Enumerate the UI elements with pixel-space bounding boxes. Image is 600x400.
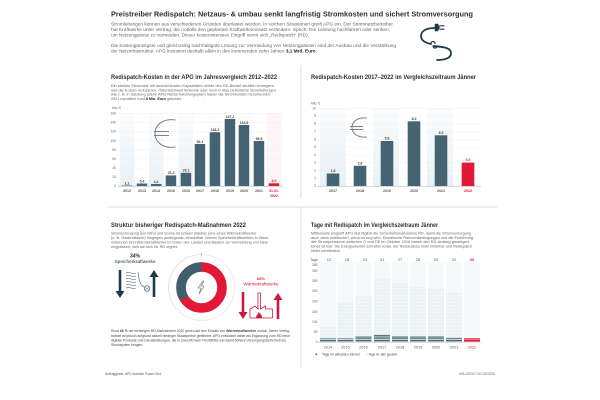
axis labels: 7 (314, 130, 316, 134)
axis labels: 4 (314, 153, 316, 157)
heading: Redispatch-Kosten 2017–2022 im Vergleichszeitraum Jänner (311, 74, 476, 81)
axis labels: 300 (312, 279, 318, 283)
axis labels: 140 (110, 121, 116, 125)
description: wie z. B. in Salzburg (siehe APG-Netzentwicklungsplan) haben die Stromkunden heruntersten (111, 92, 270, 97)
axis labels: 5 (314, 145, 316, 149)
year labels: 2019 (226, 189, 234, 193)
label: 66% thermal plants (243, 276, 279, 286)
conclusion text: Stromsystem bringen. (111, 342, 143, 347)
value labels: 29,1 (183, 169, 189, 173)
year labels: 2022 (468, 346, 476, 350)
conclusion text: barkeit ist jedoch aufgrund aktuell niedriger Staatspreise gefährdet. APG entwickelt daher als Ergänzung zum RD neue (111, 333, 291, 338)
axis labels: 10 (312, 106, 316, 110)
year labels: 2021 (255, 189, 263, 193)
year labels: 2022 (270, 194, 278, 198)
axis labels: 40 (112, 166, 116, 170)
year labels: 2019 (414, 346, 422, 350)
bar chart: annual costs (110, 106, 283, 198)
description: der Strompreiszone zwischen Ö und DE im Oktober 2018 haben den RD-Anstieg gesteigert. (311, 239, 470, 244)
label: 34% storage plants: Speicherkraftwerke (114, 259, 156, 265)
day counts: 24 (363, 257, 368, 262)
axis labels (312, 263, 318, 344)
axis labels: 60 (112, 157, 116, 161)
value labels: 147,2 (226, 115, 234, 119)
axis labels: 100 (312, 320, 318, 324)
day counts (310, 257, 475, 262)
axis labels: 20 (112, 175, 116, 179)
description: und die Kosten reduzieren. Österreichweit fehlende oder noch in Bau befindliche Stromleitungen (111, 87, 276, 92)
value labels: 4,4 (154, 180, 158, 184)
bar chart: January costs (311, 102, 481, 193)
intro text: Stromleitungen können aus verschiedenen Gründen überlastet werden. In solchen Situationen greift APG ein. Der Stromnetzbetreiber (111, 22, 394, 26)
description: Stromerzeugung aus Wind und Sonne ist schwer planbar, jene eines Wärmekraftwerks (111, 230, 256, 236)
axis labels: 250 (312, 289, 318, 293)
year labels: 2018 (396, 346, 404, 350)
description: engpässen, weil sie sich für RD eignet. (111, 244, 178, 249)
axis labels: 120 (110, 130, 116, 134)
description: Eines ist klar: Die Energiewende schreitet voran, der Netzausbau hinkt hinterher und Redispatch (311, 243, 472, 248)
description: auch dann funktioniert, wenn es eng wird. Klimatische Rahmenbedingungen und die Einführung (311, 235, 473, 240)
day counts: 12 (327, 257, 332, 262)
heading: Redispatch-Kosten in der APG im Jahresvergleich 2012–2022 (111, 74, 277, 81)
axis labels: 8 (314, 122, 316, 126)
value labels: 6,0 (272, 179, 276, 183)
axis labels: 365 (312, 263, 318, 267)
axis labels (311, 102, 320, 188)
day counts: 22 (452, 257, 457, 262)
value labels: 5,8 (385, 136, 389, 140)
axis labels: 160 (110, 112, 116, 116)
legend: Tage im aktuellen Jänner (322, 352, 361, 356)
axis labels: 2 (314, 168, 316, 172)
heading: Tage mit Redispatch im Vergleichszeitraum Jänner (311, 222, 438, 229)
intro text: Die kostengünstigste und gleichzeitig nachhaltigste Lösung zur Vermeidung von Netzengpässen sind der Ausbau und die Verstärkung (111, 43, 397, 48)
description: österreich sind Wärmekraftwerke im Osten des Landes unerlässlich zur Vermeidung von Netz- (111, 239, 270, 244)
axis labels: 9 (314, 114, 316, 118)
day counts: 30 (470, 257, 475, 262)
bar: 2022 highlighted (269, 183, 279, 186)
value labels: 8,3 (412, 117, 416, 121)
year labels: 2020 (240, 189, 248, 193)
intro text: der Netzinfrastruktur. APG investiert deshalb allein in den kommenden zehn Jahren 3,1 Mrd. Euro . (111, 48, 317, 53)
panel: costs 2012-2022 (110, 74, 283, 198)
year labels: 2018 (211, 189, 219, 193)
intro text (111, 22, 397, 53)
axis labels: 350 (312, 269, 318, 273)
conclusion text: digitale Produkte und Dienstleistungen, die in Zukunft mehr Flexibilität und damit höhere Versorgungssicherheit ins (111, 337, 286, 342)
year labels: 2012 (123, 189, 131, 193)
value labels: 2,6 (358, 161, 362, 165)
value labels: 1,6 (331, 169, 335, 173)
intro text: hat Kraftwerke unter Vertrag, die notfalls den geplanten Kraftwerkseinsatz verändern. Sprich: Die Leistung hochfahren oder senken, (111, 27, 390, 32)
year labels (329, 189, 472, 193)
axis labels: 200 (312, 300, 318, 304)
value labels: 92,1 (197, 140, 203, 144)
value labels: 23,2 (168, 171, 174, 175)
value labels: 6,5 (439, 131, 443, 135)
day counts: Tage (310, 258, 318, 262)
description: Mittlerweile eingreift APG fast täglich die Sicherheitsmaßnahme RD, damit die Stromversorgung (311, 230, 471, 236)
icon: power plug with cable (421, 24, 451, 60)
panel: days with redispatch (310, 222, 481, 356)
year labels: 2020 (410, 189, 418, 193)
title: Preistreiber Redispatch: Netzaus- & umbau senkt langfristig Stromkosten und sichert Stromversorgung (111, 10, 473, 18)
panel: costs January comparison (311, 74, 481, 193)
year labels: 2020 (432, 346, 440, 350)
intro text: um Netzengpässe zu vermeiden. Dieser kostenintensive Eingriff nennt sich „Redispatch“ (RD). (111, 32, 309, 37)
year labels: 2014 (324, 346, 332, 350)
bars (122, 119, 264, 186)
description (311, 230, 473, 253)
value labels: 118,2 (211, 128, 219, 132)
year labels: 2021 (437, 189, 445, 193)
bars (327, 121, 447, 186)
description (111, 83, 276, 101)
value labels: 133,9 (240, 121, 248, 125)
value labels: 1,1 (125, 181, 129, 185)
year labels: 2019 (383, 189, 391, 193)
axis labels: 0 (114, 184, 116, 188)
axis labels: Mio. € (112, 106, 121, 110)
year labels: 2017 (329, 189, 337, 193)
description: (z. B. Gaskraftwerk) hingegen punktgenau einstellbar. Neben Speicherkraftwerken in West- (111, 235, 270, 240)
value labels: 5,4 (140, 179, 144, 183)
day counts: 27 (398, 257, 403, 262)
description: Ein starkes Stromnetz mit ausreichenden Kapazitäten würde den RD-Bedarf deutlich verringern (111, 83, 274, 88)
divider lines (108, 65, 497, 368)
year labels: 2021 (450, 346, 458, 350)
value labels (125, 115, 276, 185)
axis labels: 0 (316, 340, 318, 344)
value labels: 99,5 (256, 137, 262, 141)
bar: 2022 highlighted (464, 338, 480, 342)
description (111, 230, 270, 249)
year labels: 2016 (182, 189, 190, 193)
day counts: 18 (345, 257, 350, 262)
year labels: 2015 (167, 189, 175, 193)
year labels (324, 346, 476, 350)
donut chart: 34% vs 66% (168, 253, 234, 320)
conclusion text (111, 328, 291, 347)
description: bleibt unerlässlich. (311, 248, 341, 253)
year labels: 2014 (152, 189, 160, 193)
icon: euro sign (154, 120, 176, 147)
day counts: 31 (380, 257, 385, 262)
bar chart: days (310, 257, 481, 356)
year labels: 2016 (359, 346, 368, 350)
axis labels: 100 (110, 139, 116, 143)
label: 34% storage plants: 34% (130, 254, 141, 260)
description: 2021 monatlich rund 8 Mio. Euro gekostet. (111, 96, 182, 101)
icon: lightning bolt (198, 281, 204, 294)
axis labels: 0 (314, 184, 316, 188)
legend: Tage im Jahr gesamt (368, 352, 397, 356)
icon: storage plant with arrows (116, 270, 158, 298)
label: 34% storage plants (114, 254, 156, 265)
footer: client credit: Auftraggeber: APG Austrian Power Grid (105, 372, 161, 376)
bars: days in year total (320, 278, 462, 342)
year labels: 2013 (138, 189, 146, 193)
icon: thermal plant with arrows (238, 292, 282, 319)
panel: structure of measures (111, 222, 291, 347)
label: 66% thermal plants: 66% (257, 276, 265, 281)
year labels: 2018 (356, 189, 364, 193)
axis labels (110, 106, 121, 188)
footer: agency code: APA-2202/01 DIS 02/02/000 (459, 372, 495, 376)
year labels: 2015 (341, 346, 350, 350)
label: 66% thermal plants: Wärmekraftwerke (243, 282, 279, 286)
conclusion text: Rund 66 % der bisherigen RD-Maßnahmen 2022 gehen auf den Einsatz von Wärmekraftwerken zurück. Deren Verfüg- (111, 328, 291, 333)
axis labels: 50 (314, 330, 318, 334)
bar: 2022 highlighted (462, 163, 474, 186)
bars: days in current January (320, 334, 462, 342)
legend (316, 352, 397, 356)
axis labels: 3 (314, 161, 316, 165)
year labels: 31.01. (269, 189, 279, 193)
year labels (123, 189, 279, 198)
year labels: 2022 (464, 189, 472, 193)
page header (111, 10, 473, 60)
day counts: 28 (416, 257, 421, 262)
axis labels: 1 (314, 176, 316, 180)
value labels (331, 117, 470, 173)
axis labels: Mio. € (311, 102, 320, 106)
axis labels: 150 (312, 310, 318, 314)
axis labels: 80 (112, 148, 116, 152)
value labels: 3,0 (466, 158, 470, 162)
icon: euro sign (350, 118, 367, 137)
year labels: 2017 (196, 189, 204, 193)
axis labels: 6 (314, 137, 316, 141)
day counts: 29 (434, 257, 439, 262)
heading: Struktur bisheriger Redispatch-Maßnahmen 2022 (111, 222, 246, 229)
year labels: 2017 (378, 346, 386, 350)
